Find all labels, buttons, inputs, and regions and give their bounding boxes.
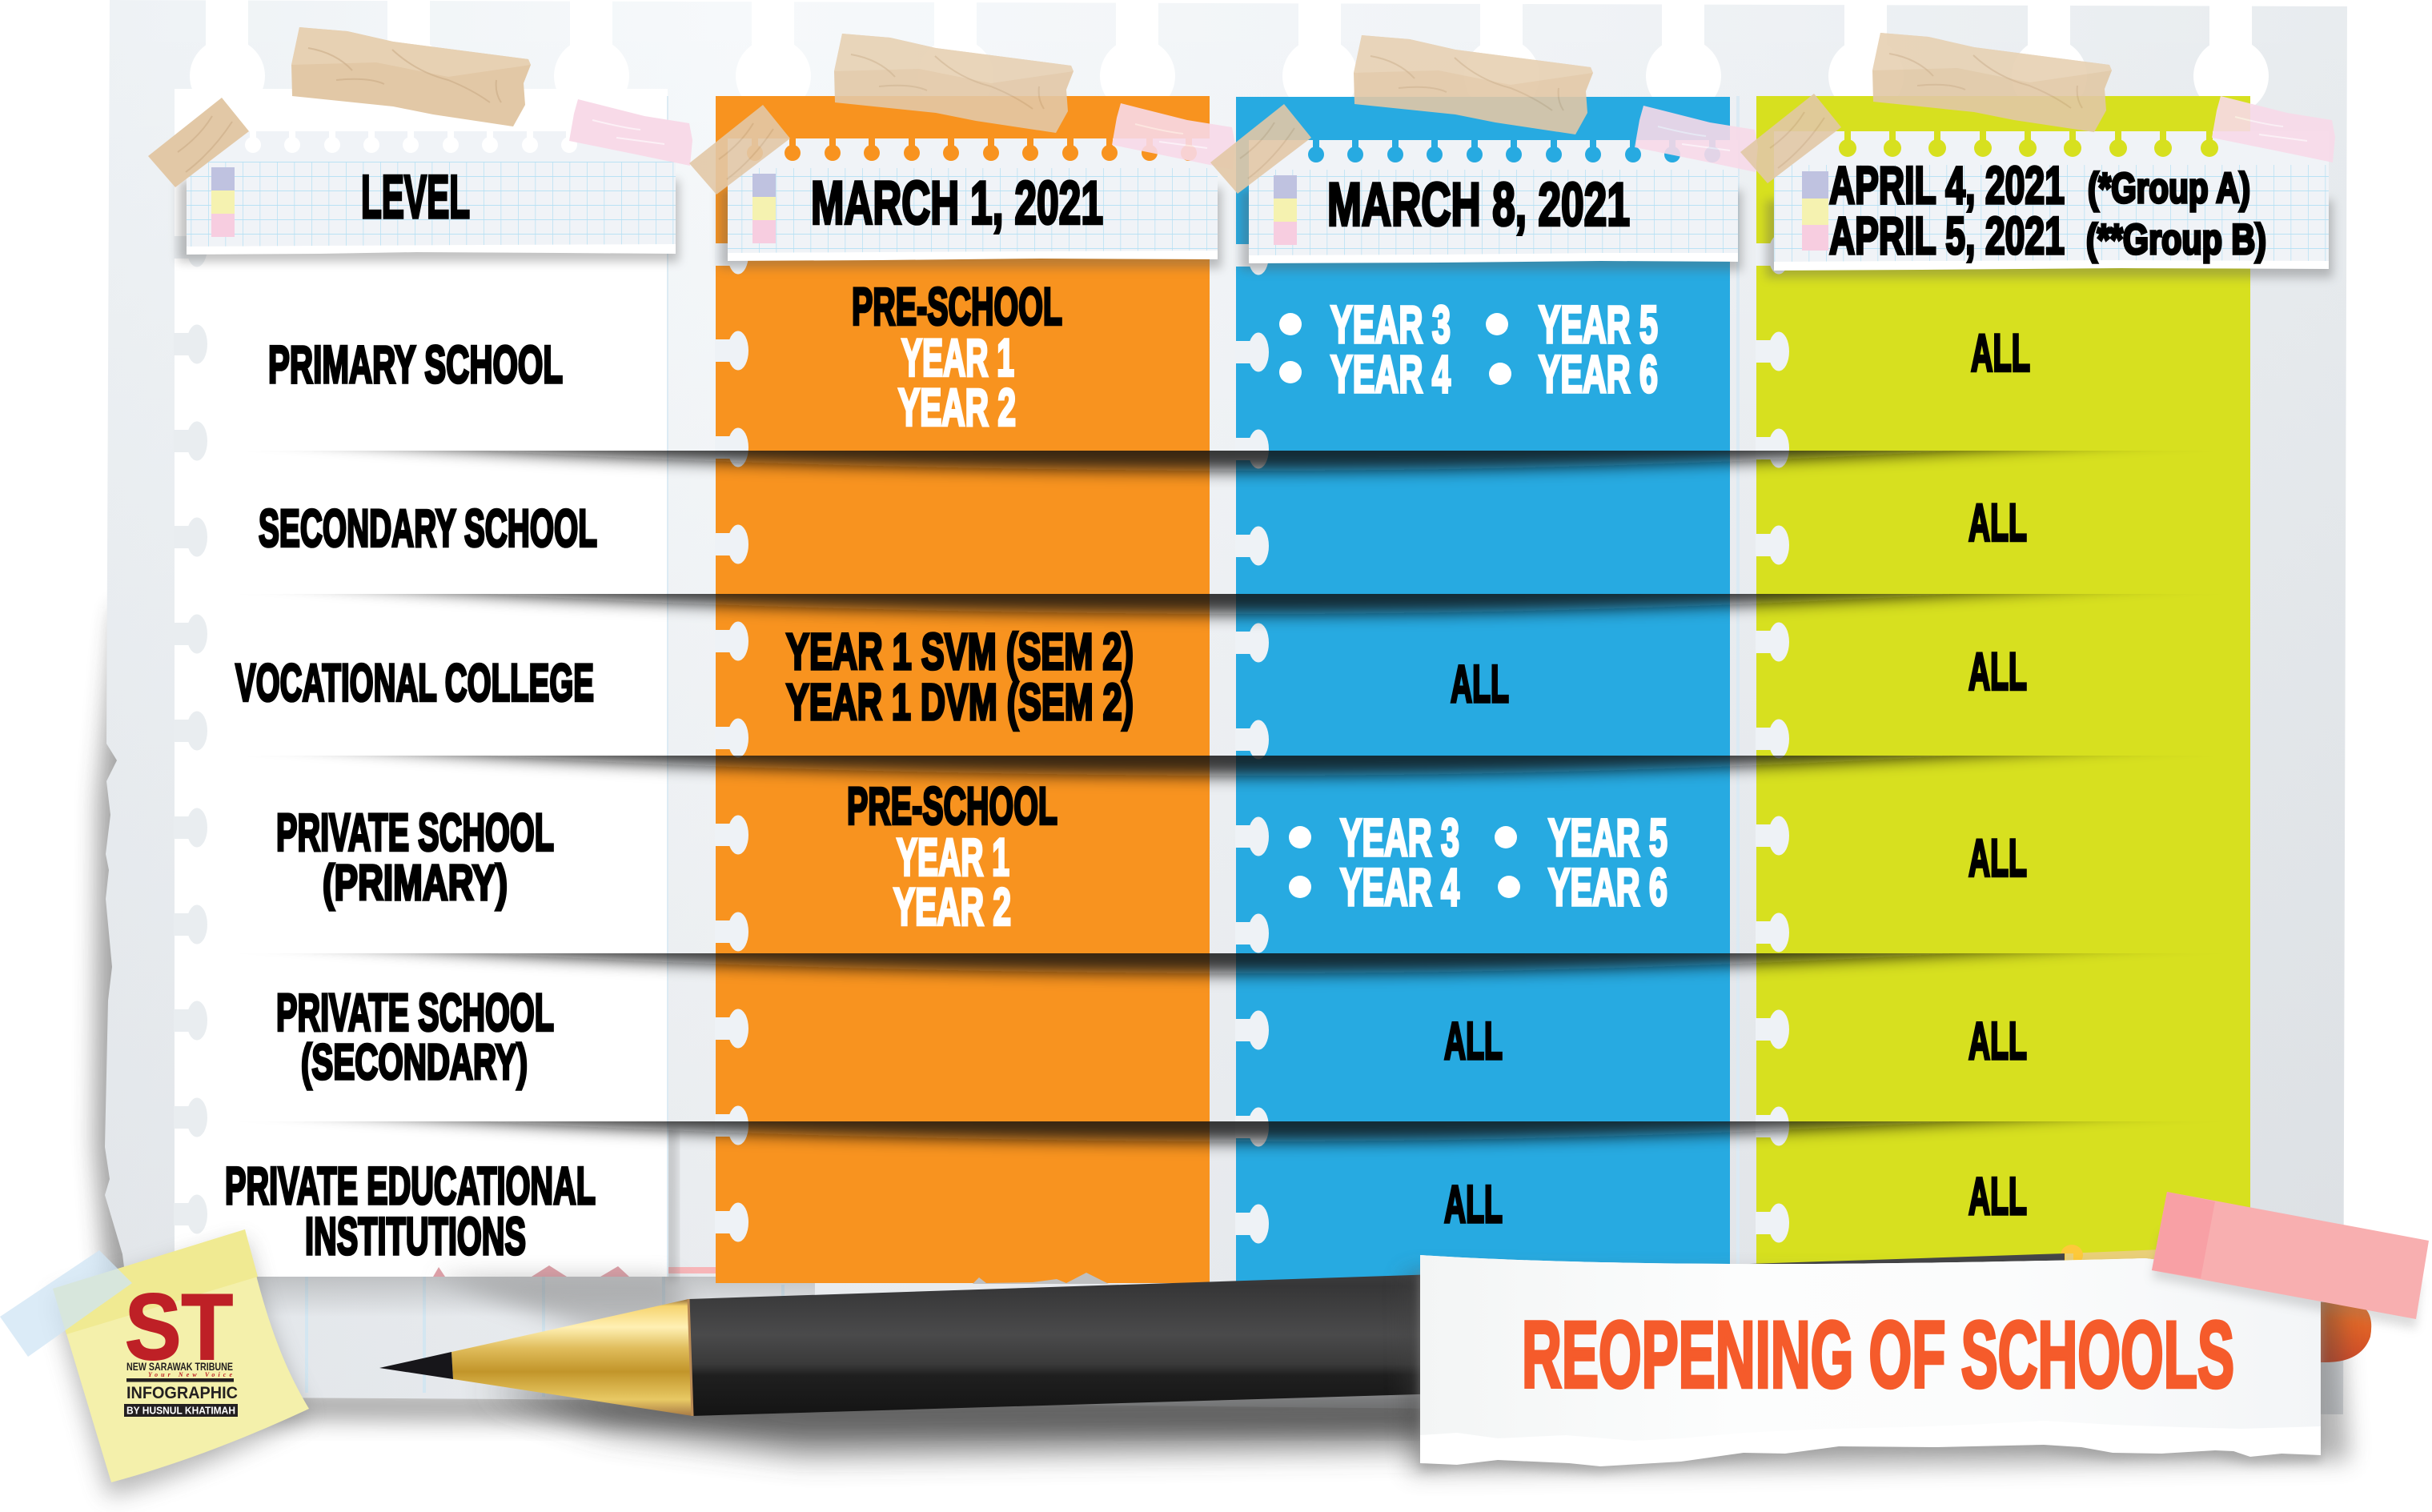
logo: ST: ST	[125, 1274, 233, 1379]
April column text: ALL	[1971, 323, 2030, 383]
March 8 column text and bullets: YEAR 4	[1340, 857, 1459, 916]
April column text: ALL	[1968, 828, 2027, 887]
tapes on March 8 card	[1210, 35, 1758, 194]
shadow right of level column	[664, 1129, 677, 1281]
title paper shadow	[1405, 1273, 2350, 1473]
panel: March 8 column	[1235, 97, 1730, 1281]
March 1 column text: YEAR 1	[897, 828, 1009, 887]
row labels: level column: PRIVATE SCHOOL	[276, 802, 554, 861]
March 8 column text and bullets: YEAR 6	[1539, 344, 1658, 403]
card: April header: (**Group B)	[2086, 216, 2266, 263]
March 8 column text and bullets: YEAR 5	[1548, 808, 1667, 867]
March 8 column text and bullets: YEAR 5	[1539, 295, 1658, 354]
April column text: ALL	[1968, 493, 2027, 552]
card: March 8 header	[1241, 132, 1742, 271]
fold shadows across rows	[224, 419, 2241, 1141]
title paper	[1420, 1255, 2321, 1473]
March 8 column text and bullets	[1279, 295, 1667, 1233]
pencil	[379, 1245, 2371, 1416]
April column text	[1968, 323, 2030, 1225]
row labels: level column: PRIVATE SCHOOL	[276, 983, 554, 1042]
tapes on level card	[148, 27, 692, 187]
logo: bar	[126, 1378, 234, 1382]
card: April header	[1766, 131, 2333, 278]
March 8 column text and bullets: YEAR 3	[1330, 295, 1451, 354]
April column text: ALL	[1968, 1166, 2027, 1225]
March 8 column text and bullets: ALL	[1444, 1174, 1503, 1233]
tapes on April card	[1740, 33, 2335, 183]
card: April header: APRIL 5, 2021	[1829, 206, 2065, 265]
March 1 column text: YEAR 2	[893, 877, 1011, 936]
row labels: level column	[225, 335, 597, 1265]
card: April header: APRIL 4, 2021	[1829, 155, 2065, 215]
tapes on March 1 card	[689, 34, 1235, 195]
March 1 column text: YEAR 2	[898, 378, 1016, 437]
card: March 1 header	[720, 132, 1222, 268]
page shadow left	[94, 608, 208, 1441]
March 1 column text: YEAR 1 DVM (SEM 2)	[786, 673, 1134, 731]
panel: level column	[174, 89, 668, 1277]
March 8 column text and bullets: ALL	[1451, 654, 1509, 713]
March 1 column text: PRE-SCHOOL	[852, 277, 1062, 336]
card: LEVEL header	[179, 131, 679, 262]
April column text: ALL	[1968, 642, 2027, 701]
panel: April column	[1756, 96, 2250, 1281]
row labels: level column: VOCATIONAL COLLEGE	[235, 653, 594, 712]
March 8 column text and bullets: YEAR 3	[1340, 808, 1459, 867]
shade under level column	[175, 1277, 815, 1349]
March 8 column text and bullets: YEAR 4	[1330, 344, 1451, 403]
pink eraser sticker	[2152, 1192, 2429, 1329]
sticky note shadow	[53, 1241, 309, 1497]
March 8 column text and bullets: ALL	[1444, 1011, 1503, 1070]
panel: March 1 column	[715, 96, 1210, 1284]
March 1 column text: YEAR 1 SVM (SEM 2)	[786, 623, 1134, 680]
row labels: level column: (SECONDARY)	[301, 1035, 528, 1090]
March 1 column text: YEAR 1	[901, 328, 1014, 387]
April column text: ALL	[1968, 1011, 2027, 1070]
card: March 8 header: MARCH 8, 2021	[1327, 171, 1630, 239]
sticky note with logo	[53, 1229, 309, 1482]
blue tape on sticky	[0, 1250, 132, 1357]
logo: newspaper name: NEW SARAWAK TRIBUNE	[126, 1360, 233, 1373]
row labels: level column: (PRIMARY)	[323, 856, 508, 911]
March 1 column text: PRE-SCHOOL	[847, 776, 1057, 836]
March 1 column text	[786, 277, 1134, 936]
logo: tagline: Your New Voice	[148, 1371, 232, 1378]
page shadow bottom	[136, 1389, 1441, 1429]
card: LEVEL header: LEVEL	[361, 163, 470, 231]
card: March 1 header: MARCH 1, 2021	[811, 170, 1103, 237]
row labels: level column: SECONDARY SCHOOL	[259, 498, 597, 557]
row labels: level column: PRIMARY SCHOOL	[268, 335, 563, 394]
logo: infographic label: INFOGRAPHIC	[126, 1384, 238, 1402]
row labels: level column: PRIVATE EDUCATIONAL	[225, 1156, 596, 1215]
pencil shadow	[480, 1381, 1441, 1453]
card: April header: (*Group A)	[2088, 165, 2250, 212]
row labels: level column: INSTITUTIONS	[305, 1206, 526, 1265]
March 8 column text and bullets: YEAR 6	[1548, 857, 1667, 916]
logo: byline: BY HUSNUL KHATIMAH	[126, 1404, 235, 1417]
